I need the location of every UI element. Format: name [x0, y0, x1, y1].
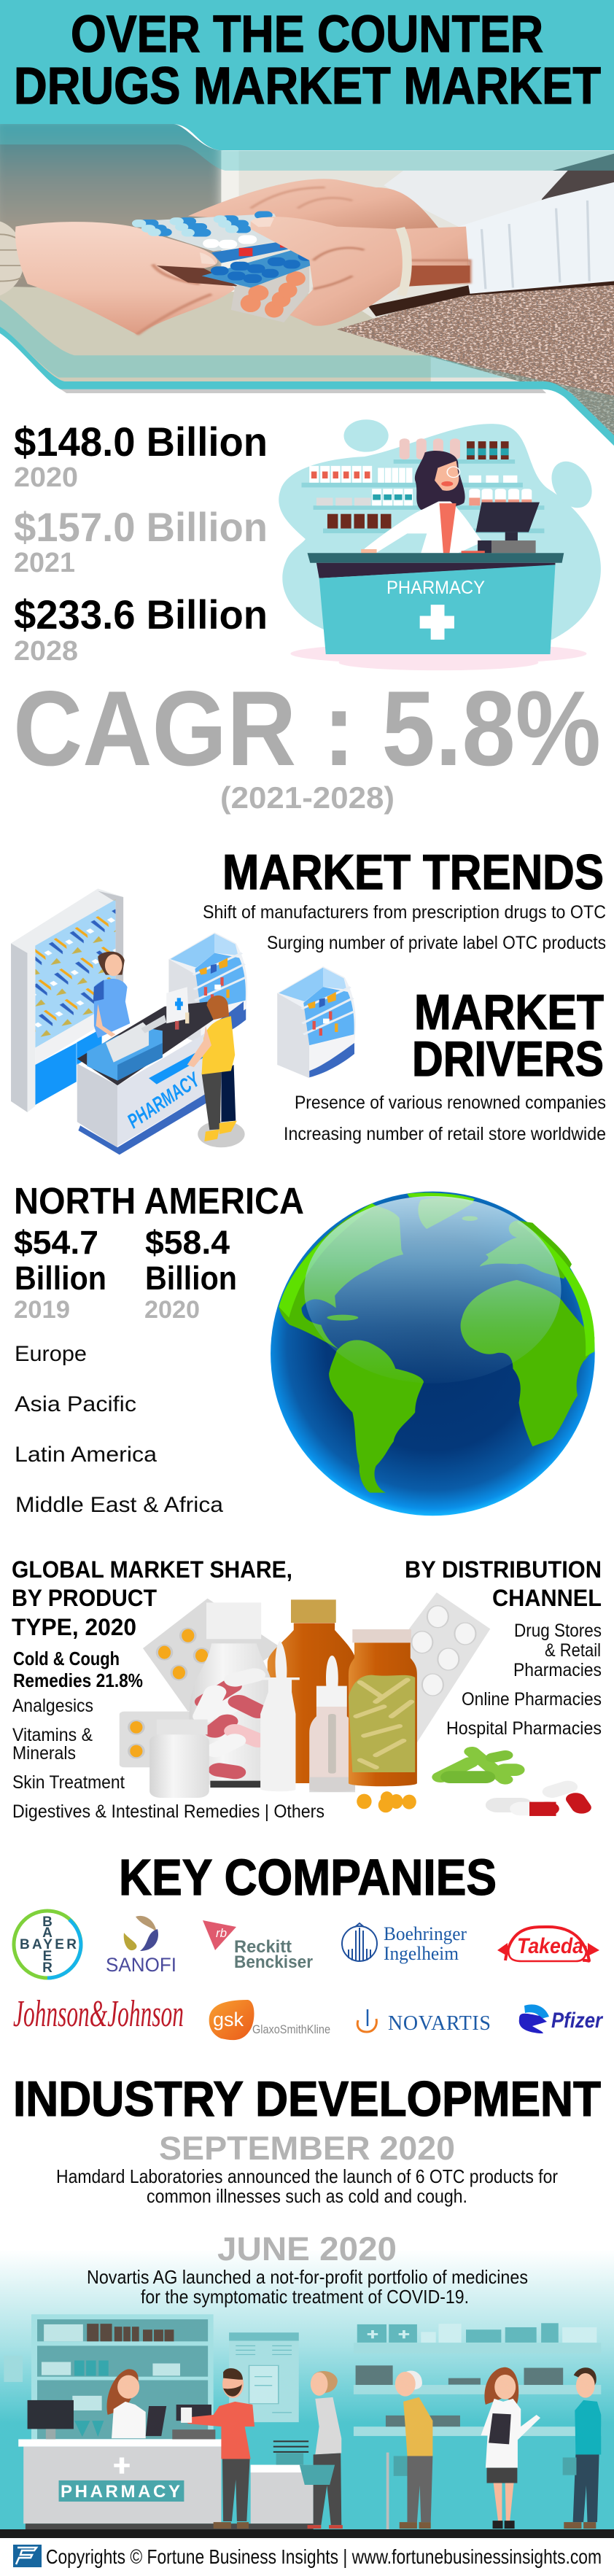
- global market share heading: [12, 1556, 292, 1640]
- regional panel: Billion: [15, 1260, 106, 1297]
- distribution channel heading: [405, 1556, 602, 1611]
- footer logo: [13, 2545, 42, 2567]
- distribution channel heading: CHANNEL: [492, 1585, 602, 1611]
- regional panel: Billion: [145, 1260, 237, 1297]
- logo: Bayer: A: [42, 1925, 53, 1941]
- logo: Sanofi: [106, 1916, 176, 1976]
- pharmacy counter label: PHARMACY: [386, 578, 485, 598]
- logo: GlaxoSmithKline: [209, 2000, 330, 2040]
- logo: Novartis: [357, 2009, 491, 2035]
- distribution channel heading: BY DISTRIBUTION: [405, 1556, 602, 1583]
- logo: Sanofi: SANOFI: [106, 1954, 176, 1976]
- development: September 2020: [56, 2130, 558, 2207]
- distribution channel list: Hospital Pharmacies: [446, 1718, 602, 1739]
- market size values: $148.0 Billion: [14, 419, 268, 465]
- medicine bottles illustration: [120, 1592, 581, 1816]
- logo: Bayer: B: [42, 1914, 53, 1930]
- product type list: Remedies 21.8%: [13, 1669, 143, 1691]
- pharmacy sign: PHARMACY: [61, 2482, 180, 2502]
- market size values: 2020: [14, 462, 78, 493]
- market trends: [203, 845, 606, 953]
- distribution channel list: Online Pharmacies: [462, 1689, 602, 1710]
- product type list: Digestives & Intestinal Remedies | Others: [12, 1801, 325, 1822]
- distribution channel list: & Retail: [545, 1640, 601, 1661]
- market drivers: [284, 985, 606, 1144]
- CAGR figure: (2021-2028): [220, 780, 395, 815]
- isometric pharmacy illustration: [11, 888, 356, 1155]
- product type list: Vitamins &: [12, 1725, 93, 1745]
- regional panel: NORTH AMERICA: [14, 1180, 304, 1222]
- logo: Novartis: NOVARTIS: [388, 2012, 491, 2035]
- market size values: 2021: [14, 548, 75, 578]
- logo: Johnson & Johnson: Johnson&Johnson: [13, 1993, 184, 2035]
- logo: Boehringer Ingelheim: Ingelheim: [384, 1943, 459, 1964]
- development: June 2020: for the symptomatic treatment of COVID-19.: [141, 2286, 469, 2308]
- development: September 2020: Hamdard Laboratories announced the launch of 6 OTC products for: [56, 2165, 558, 2187]
- logo: Reckitt Benckiser: Benckiser: [234, 1952, 313, 1972]
- logo: Takeda: [497, 1927, 599, 1961]
- logo: Pfizer: Pfizer: [551, 2009, 604, 2033]
- development: September 2020: SEPTEMBER 2020: [159, 2130, 455, 2167]
- title: [14, 6, 601, 115]
- footer bar: [0, 2529, 614, 2538]
- icon: globe: [271, 1192, 595, 1516]
- logo: Bayer: [14, 1911, 81, 1978]
- logo: Takeda: Takeda: [517, 1934, 583, 1958]
- development: September 2020: common illnesses such as cold and cough.: [147, 2185, 467, 2207]
- regional panel: Asia Pacific: [15, 1392, 136, 1416]
- regional panel: 2019: [14, 1296, 70, 1324]
- global market share heading: BY PRODUCT: [12, 1585, 157, 1611]
- logo: Reckitt Benckiser: rb: [216, 1926, 227, 1940]
- product type list: Analgesics: [12, 1696, 93, 1716]
- logo: Bayer: E: [43, 1949, 52, 1964]
- logo: Boehringer Ingelheim: [342, 1923, 467, 1964]
- logo: Reckitt Benckiser: [203, 1920, 313, 1972]
- market size values: [14, 419, 268, 667]
- counter lettering: PHARMACY: [123, 1068, 205, 1133]
- regional panel: Europe: [15, 1342, 87, 1366]
- regional panel: Latin America: [15, 1443, 157, 1467]
- market size values: $157.0 Billion: [14, 504, 268, 550]
- hero photo: hands exchanging blister packs: [0, 120, 614, 458]
- logo: Bayer: BAYER: [20, 1937, 77, 1952]
- pharmacy queue scene: [4, 2314, 601, 2529]
- market size values: 2028: [14, 636, 78, 667]
- global market share heading: GLOBAL MARKET SHARE,: [12, 1556, 292, 1583]
- regional panel: $58.4: [145, 1224, 230, 1261]
- product type list: Skin Treatment: [12, 1772, 125, 1793]
- scene background: [0, 2250, 614, 2529]
- development: June 2020: JUNE 2020: [217, 2230, 397, 2267]
- title: OVER THE COUNTER: [71, 6, 543, 63]
- development: June 2020: Novartis AG launched a not-for-profit portfolio of medicines: [87, 2266, 528, 2288]
- regional panel: Middle East & Africa: [15, 1493, 223, 1517]
- logo: Boehringer Ingelheim: Boehringer: [384, 1923, 467, 1944]
- global market share heading: TYPE, 2020: [12, 1614, 136, 1640]
- market size values: $233.6 Billion: [14, 591, 268, 637]
- key companies heading: KEY COMPANIES: [119, 1849, 497, 1906]
- illustration: pharmacist at counter: [279, 419, 601, 670]
- distribution channel list: Pharmacies: [513, 1660, 602, 1680]
- distribution channel list: Drug Stores: [514, 1621, 602, 1641]
- product type list: Cold & Cough: [13, 1648, 120, 1669]
- logo: GlaxoSmithKline: GlaxoSmithKline: [252, 2022, 330, 2036]
- regional panel: [14, 1180, 304, 1517]
- header band: [0, 0, 614, 150]
- regional panel: 2020: [144, 1296, 200, 1324]
- regional panel: $54.7: [14, 1224, 98, 1261]
- development: June 2020: [87, 2230, 528, 2308]
- logo: Pfizer: [519, 2004, 604, 2033]
- product type list: [12, 1648, 325, 1822]
- logo: Reckitt Benckiser: Reckitt: [234, 1937, 292, 1957]
- logo: Bayer: R: [42, 1960, 53, 1976]
- product type list: Minerals: [12, 1743, 76, 1764]
- distribution channel list: [446, 1621, 602, 1739]
- logo: GlaxoSmithKline: gsk: [213, 2009, 244, 2030]
